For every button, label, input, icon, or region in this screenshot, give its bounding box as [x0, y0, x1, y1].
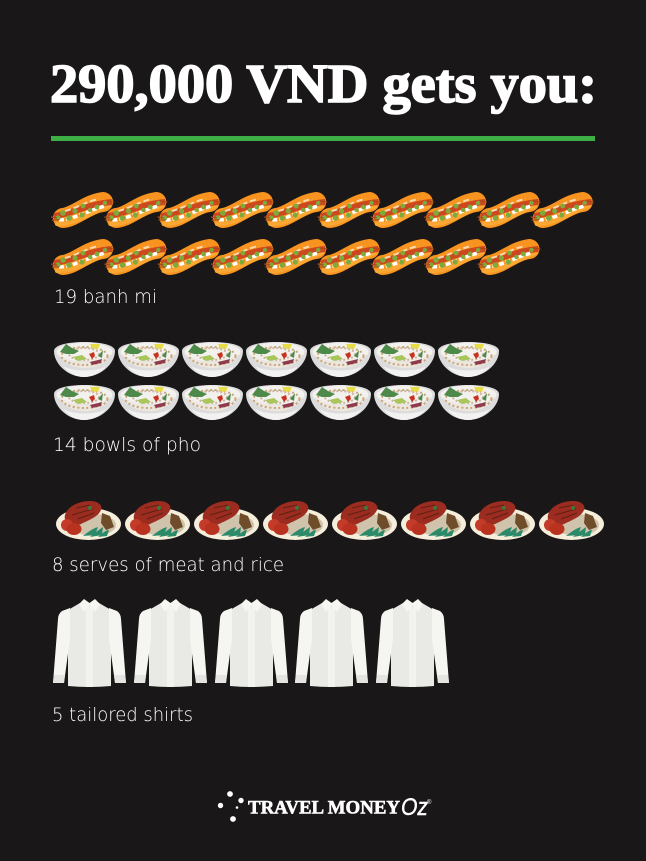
- title: 290,000 VND gets you:: [50, 53, 597, 114]
- label: banh mi: 19 banh mi: [54, 286, 157, 308]
- icon row: banh mi row 2: [51, 246, 540, 271]
- icon row: pho row 2: [54, 385, 499, 420]
- panel: pho: [53, 342, 499, 456]
- panel: shirts: [52, 599, 449, 726]
- panel: meat and rice: [52, 501, 604, 576]
- label: shirts: 5 tailored shirts: [52, 704, 193, 726]
- icon row: banh mi row 1: [51, 199, 594, 224]
- logo registered mark: ®: [427, 799, 432, 806]
- icon row: shirts: [53, 599, 449, 687]
- icon row: meat and rice: [56, 501, 604, 540]
- panel: banh mi: [51, 199, 594, 308]
- green divider: [51, 136, 595, 141]
- icon row: pho row 1: [54, 342, 499, 377]
- logo script Oz: Oz: [401, 794, 428, 821]
- logo wordmark: TRAVEL MONEY: [248, 798, 400, 818]
- label: pho: 14 bowls of pho: [53, 434, 201, 456]
- logo: Travel Money Oz: [218, 791, 432, 822]
- label: meat and rice: 8 serves of meat and rice: [52, 554, 284, 576]
- icon: southern cross stars: [218, 791, 244, 822]
